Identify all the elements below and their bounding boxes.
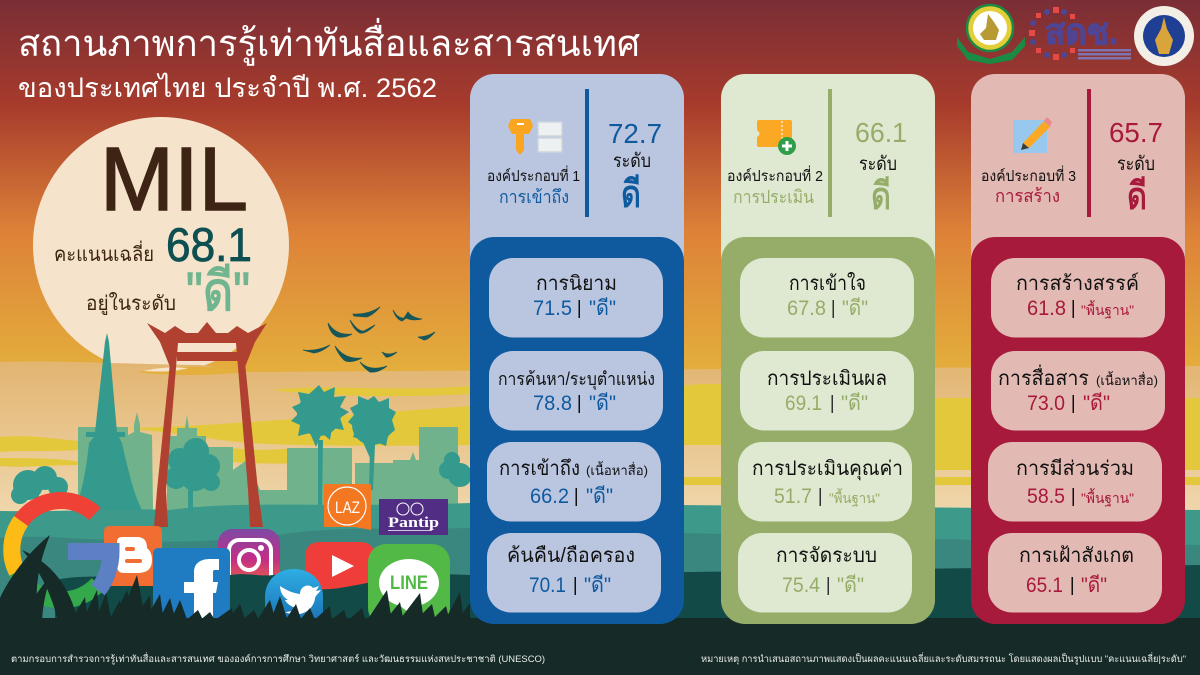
tree left xyxy=(11,466,68,515)
item: definition xyxy=(489,258,663,338)
item: retrieve: ค้นคืน/ถือครอง xyxy=(507,545,635,567)
panel: access: องค์ประกอบที่ 1 xyxy=(487,165,580,185)
panel: create: ดี xyxy=(1127,176,1147,218)
item: search: 78.8 xyxy=(533,392,572,415)
MIL score badge xyxy=(54,130,252,322)
item: monitoring: 65.1 xyxy=(1026,574,1063,597)
level label: อยู่ในระดับ xyxy=(86,292,176,316)
icon: google xyxy=(12,501,111,600)
item: retrieve: 70.1 xyxy=(529,574,566,597)
panel: evaluate: องค์ประกอบที่ 2 xyxy=(727,165,823,185)
item: understand xyxy=(740,258,914,338)
item: monitoring: การเฝ้าสังเกต xyxy=(1019,545,1134,567)
item: communication: การสื่อสาร xyxy=(998,364,1089,390)
panel: create: ระดับ xyxy=(1117,154,1155,175)
item: content access xyxy=(487,442,661,522)
birds xyxy=(303,307,435,372)
logo: sdc: สดช. xyxy=(1045,11,1118,52)
subtitle: ของประเทศไทย ประจำปี พ.ศ. 2562 xyxy=(18,73,437,103)
icon: line: LINE xyxy=(390,573,428,594)
item: creativity: การสร้างสรรค์ xyxy=(1016,272,1139,295)
panel: evaluate: ระดับ xyxy=(859,154,897,175)
icon: instagram xyxy=(218,529,280,589)
moon xyxy=(33,117,289,373)
item: communication: (เนื้อหาสื่อ) xyxy=(1096,371,1158,388)
item: search: การค้นหา/ระบุตำแหน่ง xyxy=(498,369,655,390)
item: search: "ดี" xyxy=(589,392,616,415)
chedi xyxy=(74,333,142,510)
item: evaluate value: 51.7 xyxy=(774,485,812,508)
item: understand: "ดี" xyxy=(842,297,868,320)
item: search xyxy=(489,351,663,430)
average label: คะแนนเฉลี่ย xyxy=(54,240,154,266)
logo: ministry crest xyxy=(957,5,1025,64)
grass and ground xyxy=(0,535,1200,675)
logos xyxy=(957,5,1194,66)
panel: access: ระดับ xyxy=(613,151,651,172)
panel: create: 65.7 xyxy=(1109,117,1163,148)
item: definition: 71.5 xyxy=(533,297,572,320)
item: content access: การเข้าถึง xyxy=(499,458,580,480)
item: evaluate results: การประเมินผล xyxy=(767,368,887,390)
icon: facebook xyxy=(153,548,230,628)
item: communication: 73.0 xyxy=(1027,392,1065,415)
item: evaluate results: 69.1 xyxy=(785,392,822,415)
palm trees xyxy=(291,385,396,505)
sky cloud bands xyxy=(0,361,1200,525)
item: understand: 67.8 xyxy=(787,297,826,320)
item: creativity: "พื้นฐาน" xyxy=(1081,300,1134,319)
item: monitoring: "ดี" xyxy=(1081,574,1107,597)
item: creativity xyxy=(991,258,1165,338)
icon: key xyxy=(508,119,562,155)
icon: lazada: LAZ xyxy=(335,498,360,517)
icon: pencil xyxy=(1013,117,1052,153)
item: organize: "ดี" xyxy=(837,574,864,597)
footnote: note: หมายเหตุ การนำเสนอสถานภาพแสดงเป็นผลคะแนนเฉลี่ยและระดับสมรรถนะ โดยแสดงผลเป็นรูปแบบ "คะแนนเฉลี่ย|ระดับ" xyxy=(701,652,1186,665)
logo: mahidol xyxy=(1134,6,1194,66)
panel: create: องค์ประกอบที่ 3 xyxy=(981,165,1076,185)
panel: access: ดี xyxy=(621,174,641,216)
item: definition: "ดี" xyxy=(589,297,616,320)
icon: twitter xyxy=(265,569,323,625)
item: definition: การนิยาม xyxy=(536,273,617,295)
item: participation xyxy=(988,442,1162,522)
tree right xyxy=(439,452,472,487)
icon: ticket xyxy=(757,120,796,155)
average score: 68.1 xyxy=(166,218,252,271)
item: evaluate value: "พื้นฐาน" xyxy=(829,488,880,507)
icon: lazada xyxy=(324,484,371,530)
MIL heading: MIL xyxy=(100,130,248,230)
icon: blogger xyxy=(104,526,162,586)
panel: access xyxy=(470,74,684,624)
icon: line xyxy=(368,544,450,626)
item: evaluate results xyxy=(740,351,914,430)
item: organize xyxy=(738,533,912,612)
item: organize: 75.4 xyxy=(782,574,820,597)
footnote: framework: ตามกรอบการสำรวจการรู้เท่าทันสื่อและสารสนเทศ ขององค์การการศึกษา วิทยาศาสตร์ และวัฒนธรรมแห่งสหประชาชาติ (UNESCO) xyxy=(11,652,545,665)
item: content access: 66.2 xyxy=(530,485,569,508)
panel: evaluate xyxy=(721,74,935,624)
item: participation: "พื้นฐาน" xyxy=(1081,488,1134,507)
item: evaluate results: "ดี" xyxy=(841,392,868,415)
item: evaluate value xyxy=(738,442,912,522)
item: participation: การมีส่วนร่วม xyxy=(1016,458,1134,480)
icon: pantip: Pantip xyxy=(388,515,439,531)
panel: evaluate: ดี xyxy=(871,176,891,218)
item: monitoring xyxy=(988,533,1162,612)
panel: access: การเข้าถึง xyxy=(499,187,569,207)
item: creativity: 61.8 xyxy=(1027,297,1066,320)
logo: sdc xyxy=(1029,7,1131,60)
icon: youtube xyxy=(305,542,375,590)
panel: create xyxy=(971,74,1185,624)
level value: "ดี" xyxy=(186,262,250,322)
item: retrieve: "ดี" xyxy=(584,574,611,597)
item: retrieve xyxy=(487,533,661,612)
item: participation: 58.5 xyxy=(1027,485,1065,508)
skyline: pale buildings xyxy=(78,412,458,517)
tree centre xyxy=(165,438,220,513)
background sky xyxy=(0,0,1200,375)
giant swing xyxy=(147,322,267,527)
panel: create: การสร้าง xyxy=(995,186,1060,206)
item: communication xyxy=(991,351,1165,430)
panel: access: 72.7 xyxy=(608,118,662,149)
icon: pantip xyxy=(379,499,448,535)
title: สถานภาพการรู้เท่าทันสื่อและสารสนเทศ xyxy=(18,17,640,66)
ground layers xyxy=(0,503,1200,625)
item: understand: การเข้าใจ xyxy=(789,272,866,295)
item: content access: "ดี" xyxy=(586,485,613,508)
panel: evaluate: การประเมิน xyxy=(733,187,814,207)
item: organize: การจัดระบบ xyxy=(776,545,877,567)
item: content access: (เนื้อหาสื่อ) xyxy=(586,461,648,478)
icon: foreground dark band xyxy=(230,574,372,625)
item: communication: "ดี" xyxy=(1083,392,1110,415)
item: evaluate value: การประเมินคุณค่า xyxy=(752,458,903,481)
panel: evaluate: 66.1 xyxy=(855,117,907,148)
